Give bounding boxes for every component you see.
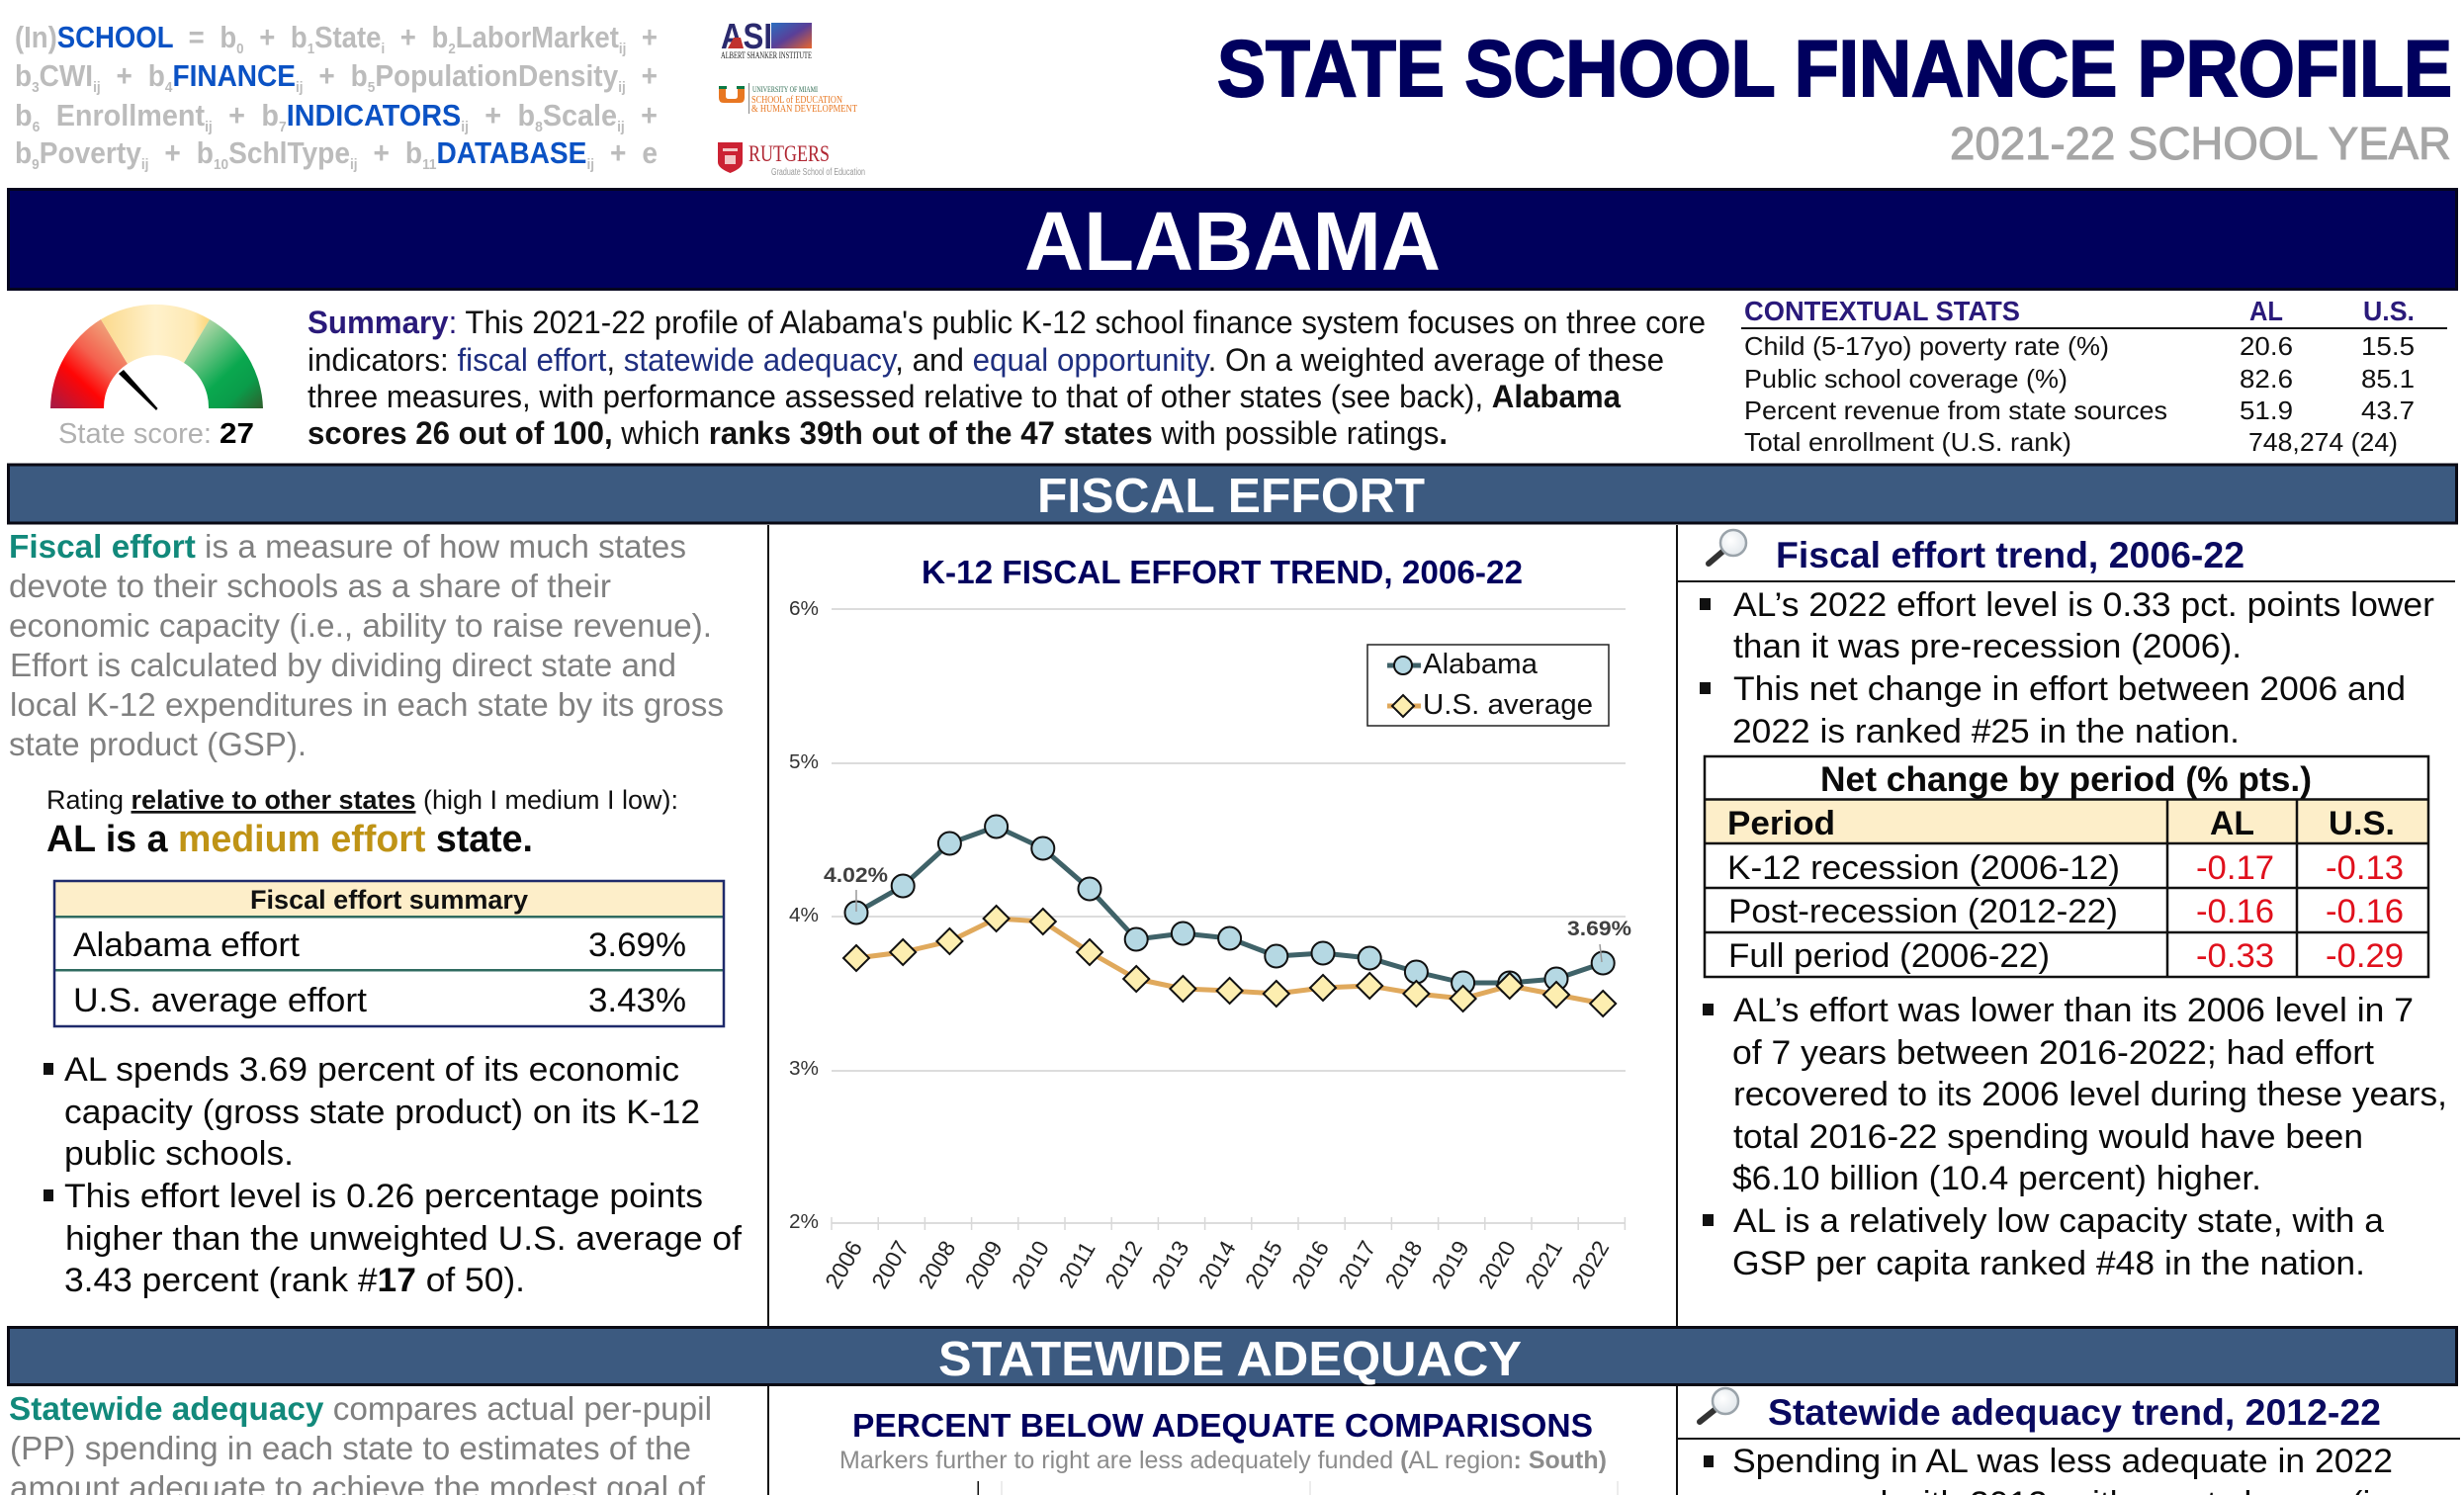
text block: statewide adequacy definition: (PP) spending in each state to estimates of the (10, 1430, 691, 1466)
text block: rating: Rating relative to other states (high I medium I low): (46, 785, 678, 815)
text block: fiscal effort definition: state product (GSP). (9, 726, 307, 762)
logo: regression equation: + (626, 58, 658, 93)
y axis and gridlines (789, 598, 1626, 1233)
text block: summary: three measures, with performance assessed relative to that of other states (see back), Alabama (308, 379, 1621, 414)
table: fiscal effort summary: Fiscal effort summary (250, 885, 528, 915)
bullets: further findings: of 7 years between 2016-2022; had effort (1732, 1034, 2375, 1072)
logo: regression equation: b (15, 135, 34, 170)
table: net change by period: -0.16 (2196, 893, 2274, 930)
logo: Rutgers: Graduate School of Education (771, 167, 865, 178)
text block: summary: indicators: fiscal effort, statewide adequacy, and equal opportunity. On a weighted average of these (308, 342, 1664, 378)
data labels (824, 864, 1631, 962)
data labels: 3.69% (1567, 918, 1631, 940)
logo: regression equation: + e (594, 135, 658, 170)
table: contextual stats: 20.6 (2240, 331, 2293, 361)
table: net change by period: K-12 recession (2006-12) (1727, 849, 2120, 887)
bullets: further findings: $6.10 billion (10.4 percent) higher. (1732, 1160, 2261, 1197)
chart title: K-12 FISCAL EFFORT TREND, 2006-22 (922, 554, 1523, 590)
y axis and gridlines: 2% (789, 1211, 819, 1233)
data labels: 4.02% (824, 864, 888, 887)
text block: summary (308, 305, 1706, 451)
table: contextual stats: 43.7 (2361, 396, 2415, 425)
table: fiscal effort summary: Alabama effort (73, 926, 301, 964)
logo: regression equation: + b (101, 58, 165, 93)
chart: percent below adequate comparisons (839, 1407, 1618, 1495)
logo: Albert Shanker Institute: ASI (721, 16, 772, 56)
logo: regression equation: ij (618, 79, 626, 96)
logo: regression equation: + (626, 20, 658, 54)
logo: regression equation: + b (244, 20, 308, 54)
table: net change by period: Period (1727, 805, 1835, 842)
panel: statewide adequacy trend findings (1700, 1388, 2393, 1495)
table: contextual stats: 15.5 (2361, 331, 2415, 361)
x axis year labels (820, 1236, 1614, 1293)
legend (1367, 645, 1609, 726)
bullets: This net change in effort between 2006 and (1733, 670, 2406, 708)
logo: regression equation: 1 (308, 41, 314, 57)
table: contextual stats: Public school coverage (%) (1744, 364, 2068, 394)
text block: summary: Summary: This 2021-22 profile of Alabama's public K-12 school finance system focuses on three core (308, 305, 1706, 340)
table: net change by period (1705, 756, 2428, 977)
x axis year labels: 2022 (1566, 1236, 1614, 1293)
logo: regression equation: + b (358, 135, 422, 170)
logo: regression equation: FINANCE (172, 58, 296, 93)
y axis and gridlines: 5% (789, 751, 819, 773)
bullets: than it was pre-recession (2006). (1733, 628, 2242, 665)
table: contextual stats: CONTEXTUAL STATS (1744, 296, 2020, 326)
logo: regression equation: ij (350, 156, 358, 173)
logo: regression equation: Scale (543, 98, 617, 132)
logo: regression equation: ij (93, 79, 101, 96)
logo: regression equation: PopulationDensity (375, 58, 619, 93)
x axis year labels: 2017 (1333, 1236, 1380, 1293)
logo: regression equation: LaborMarket (456, 20, 619, 54)
table: net change by period: -0.16 (2326, 893, 2404, 930)
x axis year labels: 2006 (820, 1236, 867, 1293)
bullets: fiscal effort findings: 3.43 percent (rank # 17 of 50). (64, 1262, 525, 1299)
logo: regression equation: + (625, 98, 658, 132)
x axis year labels: 2020 (1473, 1236, 1521, 1293)
y axis and gridlines: 6% (789, 598, 819, 620)
text block: rating: AL is a medium effort state. (46, 819, 533, 860)
logo: Rutgers (718, 141, 865, 178)
table: net change by period: Post-recession (2012-22) (1728, 893, 2118, 930)
table: contextual stats (1741, 296, 2447, 457)
logo: regression equation: 5 (368, 79, 375, 96)
x axis year labels: 2016 (1286, 1236, 1334, 1293)
table: fiscal effort summary (54, 881, 724, 1026)
table: net change by period: AL (2210, 805, 2254, 842)
logo: University of Miami: UNIVERSITY OF MIAMI (752, 85, 818, 94)
x axis year labels: 2015 (1240, 1236, 1287, 1293)
section header: statewide adequacy: STATEWIDE ADEQUACY (938, 1333, 1522, 1386)
x axis year labels: 2021 (1520, 1236, 1567, 1293)
logo: regression equation: ij (617, 119, 625, 135)
logo: regression equation: + b (303, 58, 368, 93)
logo: University of Miami (719, 83, 857, 115)
text block: summary: scores 26 out of 100, which ranks 39th out of the 47 states with possible ratings. (308, 415, 1448, 451)
logo: regression equation: Enrollment (40, 98, 205, 132)
logo: regression equation: 3 (32, 79, 40, 96)
table: fiscal effort summary: 3.43% (588, 982, 686, 1019)
x axis year labels: 2019 (1427, 1236, 1474, 1293)
table: contextual stats: Percent revenue from state sources (1744, 396, 2167, 425)
chart title: PERCENT BELOW ADEQUATE COMPARISONS (852, 1407, 1593, 1444)
logo: Rutgers: RUTGERS (748, 141, 830, 166)
x axis year labels: 2012 (1100, 1236, 1147, 1293)
bullets: further findings: total 2016-22 spending would have been (1733, 1118, 2363, 1156)
logo: University of Miami: & HUMAN DEVELOPMENT (751, 104, 857, 115)
icon: magnifying glass (1700, 1388, 1738, 1422)
banner: state name (8, 190, 2456, 289)
text block: rating (46, 785, 678, 860)
bullets: further findings: AL is a relatively low capacity state, with a (1733, 1202, 2384, 1240)
y axis and gridlines: 3% (789, 1058, 819, 1080)
series: U.S. average (843, 906, 1616, 1016)
bullets (1700, 586, 2434, 750)
logo: Albert Shanker Institute: ALBERT SHANKER INSTITUTE (721, 50, 812, 60)
logo: regression equation (15, 20, 658, 173)
heading: Statewide adequacy trend, 2012-22 (1768, 1392, 2381, 1433)
table: fiscal effort summary: U.S. average effort (73, 982, 368, 1019)
logo: regression equation: 9 (32, 156, 40, 173)
table: contextual stats: 85.1 (2361, 364, 2415, 394)
x axis year labels: 2014 (1193, 1236, 1241, 1293)
text block: fiscal effort definition: local K-12 expenditures in each state by its gross (10, 686, 724, 723)
chart subtitle: Markers further to right are less adequately funded (AL region: South) (839, 1447, 1607, 1474)
logo: regression equation: State (314, 20, 381, 54)
text block: fiscal effort definition: economic capacity (i.e., ability to raise revenue). (9, 607, 712, 644)
text block: fiscal effort definition (9, 528, 724, 762)
section header: statewide adequacy (8, 1327, 2456, 1386)
logo: regression equation: 6 (33, 119, 40, 135)
x axis year labels: 2011 (1053, 1237, 1100, 1292)
legend: U.S. average (1423, 689, 1593, 721)
x axis year labels: 2009 (960, 1236, 1008, 1293)
bullets: further findings: AL’s effort was lower than its 2006 level in 7 (1733, 992, 2414, 1029)
text block: fiscal effort definition: Effort is calculated by dividing direct state and (10, 647, 676, 683)
logo: regression equation: ij (619, 41, 626, 57)
logo: regression equation: + b (148, 135, 214, 170)
table: net change by period: -0.17 (2196, 849, 2274, 887)
table: contextual stats: 748,274 (24) (2248, 427, 2398, 457)
logo: regression equation: i (381, 41, 385, 57)
bullets: fiscal effort findings: capacity (gross state product) on its K-12 (64, 1094, 700, 1131)
x axis year labels: 2013 (1146, 1236, 1194, 1293)
bullets: AL’s 2022 effort level is 0.33 pct. points lower (1733, 586, 2434, 624)
table: net change by period: -0.33 (2196, 937, 2274, 975)
axis stubs (1002, 1481, 1618, 1495)
logo: regression equation: + b (385, 20, 448, 54)
logo: Albert Shanker Institute (721, 16, 812, 60)
text block: fiscal effort definition: Fiscal effort is a measure of how much states (9, 528, 686, 565)
bullets: fiscal effort findings: This effort level is 0.26 percentage points (64, 1178, 703, 1215)
table: net change by period: U.S. (2329, 805, 2395, 842)
bullets: 2022 is ranked #25 in the nation. (1732, 713, 2240, 750)
logo: regression equation: b (15, 58, 34, 93)
bullets: fiscal effort findings: public schools. (64, 1135, 294, 1173)
text block: fiscal effort definition: devote to their schools as a share of their (9, 568, 611, 604)
x axis year labels: 2010 (1007, 1236, 1054, 1293)
logo: regression equation: 10 (214, 156, 228, 173)
bullets: further findings: recovered to its 2006 level during these years, (1733, 1076, 2447, 1113)
table: contextual stats: Total enrollment (U.S. rank) (1744, 427, 2071, 457)
series: Alabama (844, 815, 1615, 995)
bullets: further findings: GSP per capita ranked #48 in the nation. (1732, 1245, 2365, 1282)
x axis year labels: 2008 (913, 1236, 961, 1293)
bullets (1704, 1443, 2393, 1495)
icon: magnifying glass (1709, 530, 1746, 564)
logo: University of Miami: SCHOOL of EDUCATION (751, 95, 842, 106)
logo: regression equation: ij (205, 119, 213, 135)
x axis year labels: 2007 (866, 1236, 914, 1293)
logo: regression equation: + b (469, 98, 535, 132)
gauge: state score: 27 (220, 418, 254, 450)
logo: regression equation: ij (141, 156, 148, 173)
logo: regression equation: b (15, 98, 34, 132)
table: net change by period: -0.13 (2326, 849, 2404, 887)
table: contextual stats: U.S. (2363, 296, 2415, 326)
bullets: further findings (1703, 992, 2447, 1282)
logo: regression equation: (In)SCHOOL = b (15, 20, 244, 54)
logo: regression equation: + b (213, 98, 279, 132)
table: net change by period: Net change by period (% pts.) (1820, 760, 2312, 799)
table: contextual stats: 82.6 (2240, 364, 2293, 394)
x axis year labels: 2018 (1379, 1236, 1428, 1293)
logo: regression equation: Poverty (40, 135, 142, 170)
logo: regression equation: 7 (279, 119, 287, 135)
logo: regression equation: 2 (448, 41, 456, 57)
heading: Fiscal effort trend, 2006-22 (1776, 535, 2244, 575)
logo: regression equation: DATABASE (436, 135, 586, 170)
section header: fiscal effort: FISCAL EFFORT (1037, 470, 1425, 523)
table: net change by period: -0.29 (2326, 937, 2404, 975)
subtitle: school year: 2021-22 SCHOOL YEAR (1950, 118, 2451, 169)
logo: regression equation: INDICATORS (287, 98, 461, 132)
logo: regression equation: SchlType (228, 135, 350, 170)
section header: fiscal effort (8, 465, 2456, 523)
bullets: fiscal effort findings: AL spends 3.69 percent of its economic (64, 1051, 679, 1089)
logo: regression equation: 8 (535, 119, 543, 135)
table: net change by period: Full period (2006-22) (1728, 937, 2050, 975)
legend: Alabama (1423, 649, 1539, 680)
bullets: fiscal effort findings (44, 1051, 743, 1299)
gauge: state score (50, 305, 263, 450)
logo: regression equation: ij (461, 119, 469, 135)
logo: regression equation: 4 (165, 79, 173, 96)
logo: regression equation: 0 (236, 41, 244, 57)
table: fiscal effort summary: 3.69% (588, 926, 686, 964)
bullets: fiscal effort findings: higher than the unweighted U.S. average of (65, 1220, 743, 1258)
text block: statewide adequacy definition (9, 1390, 712, 1495)
logo: regression equation: ij (296, 79, 303, 96)
table: contextual stats: AL (2249, 296, 2283, 326)
logo: regression equation: 11 (422, 156, 436, 173)
chart: K-12 fiscal effort trend (789, 554, 1631, 1293)
text block: statewide adequacy definition: Statewide adequacy compares actual per-pupil (9, 1390, 712, 1427)
banner: state name: ALABAMA (1024, 195, 1441, 288)
logo: regression equation: ij (586, 156, 594, 173)
logo: regression equation: CWI (40, 58, 93, 93)
gauge: state score: State score: (58, 418, 212, 450)
table: contextual stats: 51.9 (2240, 396, 2293, 425)
table: contextual stats: Child (5-17yo) poverty rate (%) (1744, 331, 2109, 361)
panel: fiscal effort trend findings (1700, 530, 2447, 1282)
y axis and gridlines: 4% (789, 905, 819, 926)
bullets: Spending in AL was less adequate in 2022 (1732, 1443, 2393, 1480)
